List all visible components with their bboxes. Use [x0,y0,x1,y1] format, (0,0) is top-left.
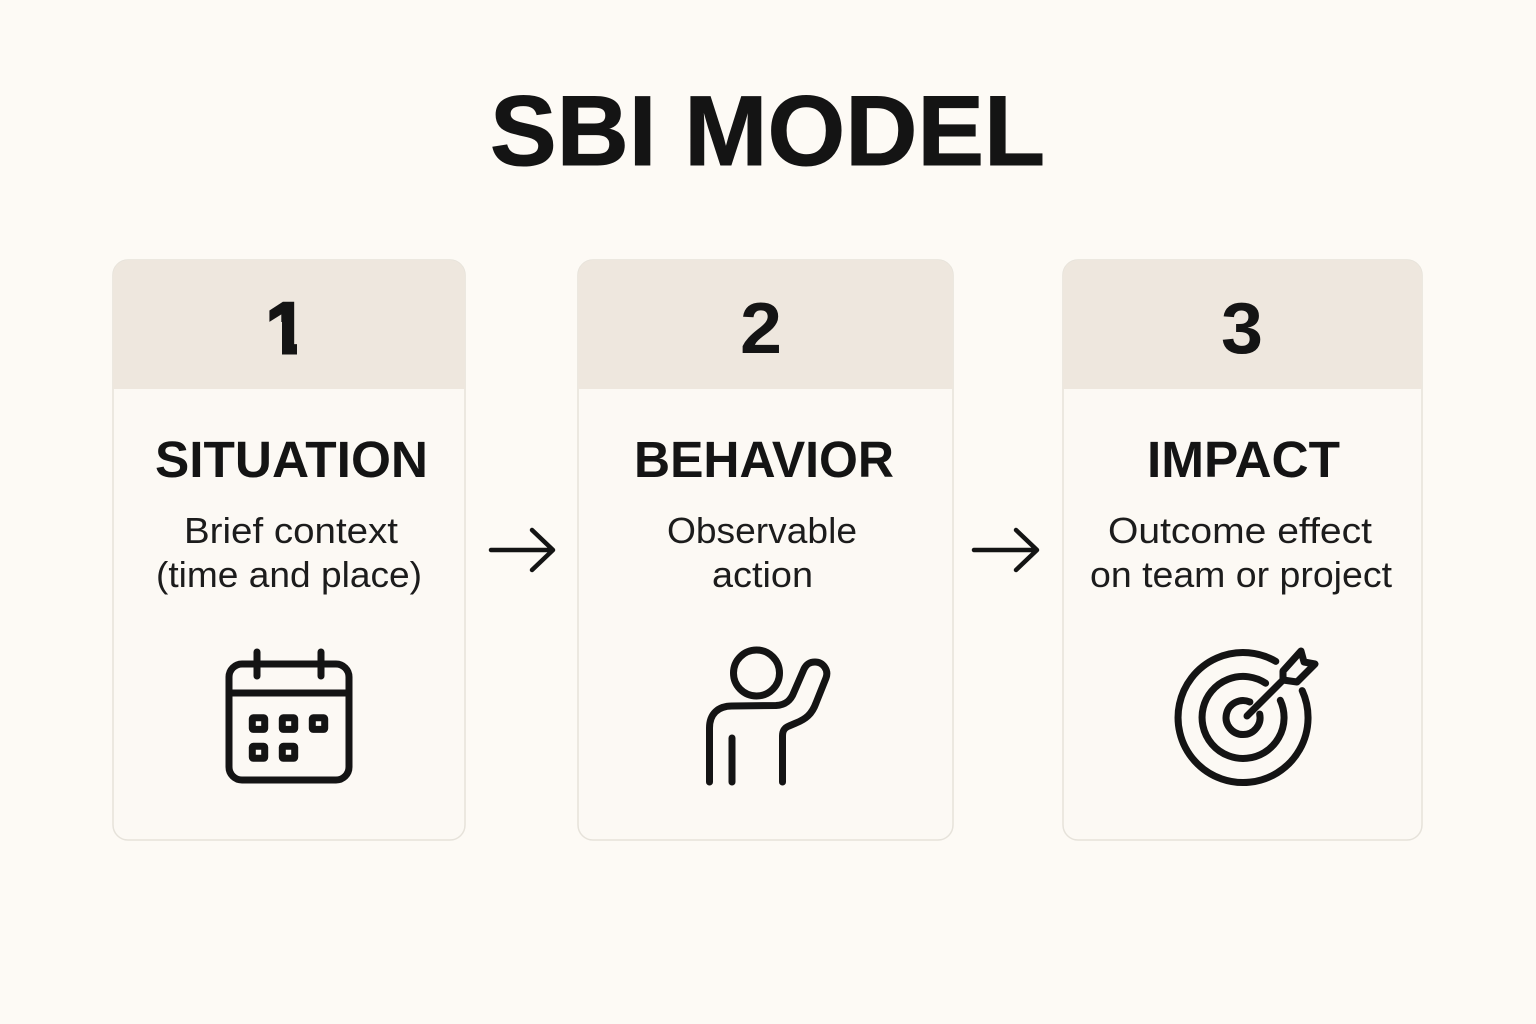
panel: behavior [578,260,953,840]
step number 3: 3 [1221,289,1263,369]
panel: impact [1063,260,1422,840]
description: situation: (time and place) [156,554,422,595]
description: situation [156,510,422,595]
heading: impact: IMPACT [1147,431,1340,488]
description: behavior: action [712,554,813,595]
card background [578,260,953,840]
description: impact: Outcome effect [1108,510,1372,551]
description: behavior [667,510,857,595]
heading: behavior: BEHAVIOR [634,431,894,488]
panel: situation [113,260,465,840]
card background [1063,260,1422,840]
heading: situation: SITUATION [155,431,428,488]
card background [113,260,465,840]
step number 2: 2 [740,289,782,369]
description: behavior: Observable [667,510,857,551]
description: impact: on team or project [1090,554,1392,595]
number header band [113,260,465,389]
icon: person raising hand [710,650,827,782]
arrow: situation to behavior [491,530,553,570]
number header band [578,260,953,389]
icon: target with arrow [1178,651,1315,783]
title: SBI MODEL [490,75,1045,186]
step number 1: 1 [266,289,306,369]
description: situation: Brief context [184,510,398,551]
number header band [1063,260,1422,389]
icon: calendar [229,652,349,780]
arrow: behavior to impact [974,530,1037,570]
description: impact [1090,510,1392,595]
